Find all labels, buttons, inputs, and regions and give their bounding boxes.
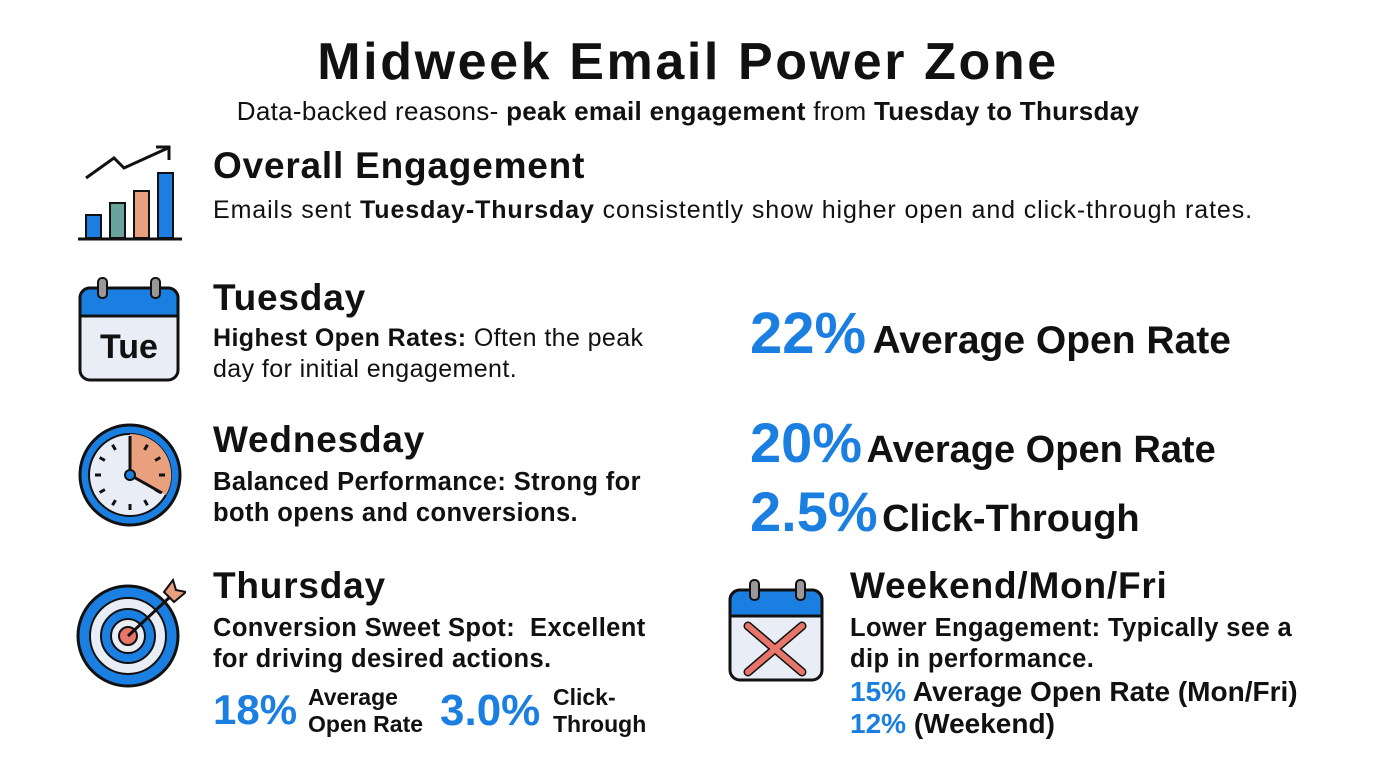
text: Thursday: Conversion Sweet Spot: Excellent xyxy=(213,614,646,642)
title: Midweek Email Power Zone xyxy=(317,33,1059,91)
icon: Tue calendar: Tue xyxy=(100,328,158,366)
stats: weekend xyxy=(850,676,1298,739)
text: Tuesday xyxy=(213,324,643,383)
stats: weekend: 12% (Weekend) xyxy=(850,708,1055,739)
stat: Tuesday: 22% Average Open Rate xyxy=(750,301,1231,366)
stats: Wednesday: 2.5% Click-Through xyxy=(750,480,1140,543)
text: Tuesday: Highest Open Rates: Often the peak xyxy=(213,324,643,352)
heading: weekend: Weekend/Mon/Fri xyxy=(850,565,1168,606)
heading: Tuesday: Tuesday xyxy=(213,277,366,318)
icon: bar chart xyxy=(78,146,182,240)
icon: crossed calendar xyxy=(728,579,824,682)
heading: Thursday: Thursday xyxy=(213,565,386,606)
stats: Wednesday xyxy=(750,411,1216,543)
stats: Thursday: Through xyxy=(553,711,646,737)
heading: Wednesday: Wednesday xyxy=(213,419,425,460)
heading: overall engagement: Overall Engagement xyxy=(213,145,585,186)
stats: Thursday: 3.0% xyxy=(440,686,540,735)
stats: Thursday xyxy=(213,684,646,737)
stats: weekend: 15% Average Open Rate (Mon/Fri) xyxy=(850,676,1298,707)
icon: target xyxy=(76,578,186,688)
text: Tuesday: day for initial engagement. xyxy=(213,355,517,383)
text: weekend: dip in performance. xyxy=(850,645,1094,673)
text: weekend xyxy=(850,614,1292,673)
icon: clock xyxy=(78,424,182,526)
text: Wednesday: both opens and conversions. xyxy=(213,499,578,527)
text: Wednesday xyxy=(213,468,641,527)
text: Wednesday: Balanced Performance: Strong for xyxy=(213,468,641,496)
stats: Thursday: 18% xyxy=(213,686,297,733)
stats: Thursday: Click- xyxy=(553,684,616,710)
text: weekend: Lower Engagement: Typically see a xyxy=(850,614,1292,642)
stats: Thursday: Average xyxy=(308,684,398,710)
text: Thursday xyxy=(213,614,646,673)
text: Thursday: for driving desired actions. xyxy=(213,645,552,673)
stats: Thursday: Open Rate xyxy=(308,711,423,737)
subtitle: Data-backed reasons- peak email engagement from Tuesday to Thursday xyxy=(237,96,1139,126)
stats: Wednesday: 20% Average Open Rate xyxy=(750,411,1216,474)
text: overall engagement: Emails sent Tuesday-Thursday consistently show higher open and click-through rates. xyxy=(213,196,1253,224)
icon: Tue calendar xyxy=(78,277,180,382)
